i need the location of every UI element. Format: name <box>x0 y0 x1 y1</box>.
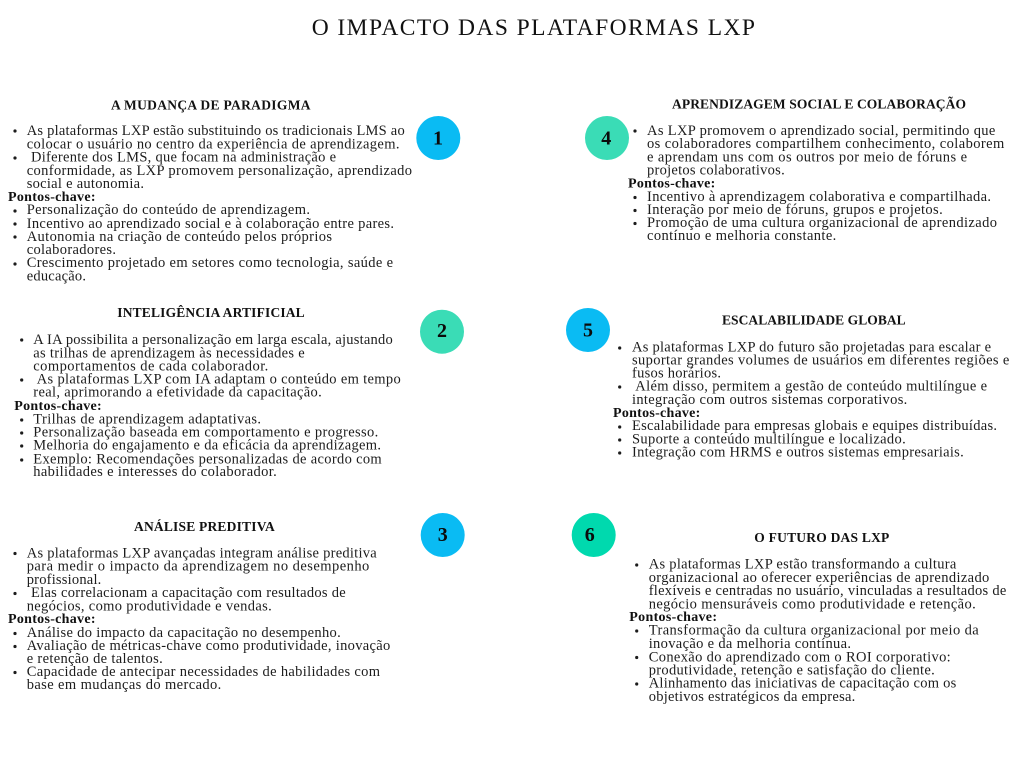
key points 6 <box>629 610 979 705</box>
key points 5: Suporte a conteúdo multilíngue e localizado. <box>632 431 906 447</box>
key points 6: Pontos-chave: <box>629 610 717 625</box>
key points 4: Incentivo à aprendizagem colaborativa e compartilhada. <box>647 189 991 205</box>
key points 6: objetivos estratégicos da empresa. <box>649 689 855 705</box>
panel: aprendizagem social e colaboração <box>628 96 1005 244</box>
key points 1: Crescimento projetado em setores como tecnologia, saúde e <box>27 255 393 271</box>
text block: introduction 3: Elas correlacionam a capacitação com resultados de <box>31 585 346 601</box>
text block: introduction 1: conformidade, as LXP promovem personalização, aprendizado <box>27 163 412 179</box>
key points 3: e retenção de talentos. <box>27 651 163 667</box>
key points 3 <box>8 612 390 693</box>
text block: introduction 2 <box>20 332 401 401</box>
icon: number badge 6: 6 <box>585 524 595 546</box>
text block: introduction 3 <box>13 545 377 614</box>
text block: introduction 6 <box>635 556 1006 612</box>
text block: introduction 2: As plataformas LXP com IA adaptam o conteúdo em tempo <box>37 371 401 387</box>
text block: introduction 2: as trilhas de aprendizagem às necessidades e <box>33 345 305 361</box>
key points 2 <box>14 399 382 480</box>
panel: análise preditiva <box>8 519 390 693</box>
text block: introduction 2: comportamentos de cada colaborador. <box>33 358 268 374</box>
key points 1: colaboradores. <box>27 242 116 258</box>
key points 4 <box>628 176 997 244</box>
icon: number badge 5: 5 <box>583 320 593 342</box>
panel: a mudança de paradigma <box>8 97 412 284</box>
text block: introduction 4: projetos colaborativos. <box>647 162 785 178</box>
key points 4: contínuo e melhoria constante. <box>647 228 836 244</box>
key points 4: Interação por meio de fóruns, grupos e projetos. <box>647 202 943 218</box>
key points 4: Promoção de uma cultura organizacional de aprendizado <box>647 215 997 231</box>
text block: introduction 5: Além disso, permitem a gestão de conteúdo multilíngue e <box>635 378 987 394</box>
key points 1: educação. <box>27 268 86 284</box>
key points 2: habilidades e interesses do colaborador. <box>33 464 277 480</box>
heading: escalabilidade global: ESCALABILIDADE GLOBAL <box>722 312 906 327</box>
key points 1: Pontos-chave: <box>8 190 96 205</box>
text block: introduction 5 <box>618 340 1009 408</box>
key points 2: Exemplo: Recomendações personalizadas de acordo com <box>33 451 382 467</box>
key points 3: Análise do impacto da capacitação no desempenho. <box>27 625 341 641</box>
text block: introduction 6: negócio mensuráveis como produtividade e retenção. <box>649 596 976 612</box>
text block: introduction 5: suportar grandes volumes de usuários em diferentes regiões e <box>632 352 1009 368</box>
panel: inteligência artificial <box>14 305 401 480</box>
text block: introduction 6: flexíveis e centradas no usuário, vinculadas a resultados de <box>649 583 1006 599</box>
heading: inteligência artificial: INTELIGÊNCIA ARTIFICIAL <box>117 305 305 320</box>
text block: introduction 6: organizacional ao oferecer experiências de aprendizado <box>649 570 989 586</box>
key points 2: Trilhas de aprendizagem adaptativas. <box>33 411 261 427</box>
icon: number badge 6 <box>572 513 616 557</box>
text block: introduction 4 <box>633 123 1005 178</box>
icon: number badge 1: 1 <box>433 128 443 150</box>
text block: introduction 5: fusos horários. <box>632 365 721 381</box>
key points 6: Alinhamento das iniciativas de capacitação com os <box>649 675 957 691</box>
icon: number badge 4: 4 <box>601 128 611 150</box>
key points 5 <box>613 406 997 460</box>
key points 4: Pontos-chave: <box>628 176 715 191</box>
key points 3: Avaliação de métricas-chave como produtividade, inovação <box>27 638 390 654</box>
panel: o futuro das lxp <box>629 530 1006 705</box>
text block: introduction 1 <box>13 123 412 192</box>
icon: number badge 3: 3 <box>438 524 448 546</box>
text block: introduction 5: integração com outros sistemas corporativos. <box>632 392 907 408</box>
key points 6: inovação e da melhoria contínua. <box>649 636 851 652</box>
text block: introduction 4: e aprendam uns com os outros por meio de fóruns e <box>647 150 967 166</box>
text block: introduction 5: As plataformas LXP do futuro são projetadas para escalar e <box>632 340 991 356</box>
text block: introduction 2: real, aprimorando a efetividade da capacitação. <box>33 385 322 401</box>
text block: introduction 1: Diferente dos LMS, que focam na administração e <box>31 150 336 166</box>
key points 5: Integração com HRMS e outros sistemas empresariais. <box>632 444 964 460</box>
text block: introduction 2: A IA possibilita a personalização em larga escala, ajustando <box>33 332 393 348</box>
heading: a mudança de paradigma: A MUDANÇA DE PARADIGMA <box>111 97 311 112</box>
panel: escalabilidade global <box>613 312 1009 460</box>
key points 3: Pontos-chave: <box>8 612 96 627</box>
heading: análise preditiva: ANÁLISE PREDITIVA <box>134 519 275 534</box>
key points 2: Pontos-chave: <box>14 399 102 414</box>
key points 2: Personalização baseada em comportamento e progresso. <box>33 424 378 440</box>
icon: number badge 2 <box>420 310 464 354</box>
key points 1 <box>8 190 394 284</box>
icon: number badge 2: 2 <box>437 320 447 342</box>
text block: introduction 1: As plataformas LXP estão substituindo os tradicionais LMS ao <box>27 123 405 139</box>
text block: introduction 6: As plataformas LXP estão transformando a cultura <box>649 556 957 572</box>
key points 3: Capacidade de antecipar necessidades de habilidades com <box>27 664 381 680</box>
text block: introduction 4: As LXP promovem o aprendizado social, permitindo que <box>647 123 995 139</box>
key points 5: Pontos-chave: <box>613 406 700 421</box>
text block: introduction 1: colocar o usuário no centro da experiência de aprendizagem. <box>27 136 399 152</box>
key points 6: Transformação da cultura organizacional por meio da <box>649 622 979 638</box>
key points 6: produtividade, retenção e satisfação do cliente. <box>649 662 935 678</box>
icon: number badge 5 <box>566 308 610 352</box>
key points 1: Personalização do conteúdo de aprendizagem. <box>27 202 310 218</box>
key points 3: base em mudanças do mercado. <box>27 677 221 693</box>
text block: introduction 3: negócios, como produtividade e vendas. <box>27 598 272 614</box>
text block: introduction 3: profissional. <box>27 572 101 588</box>
text block: introduction 4: os colaboradores compartilhem conhecimento, colaborem <box>647 136 1005 152</box>
heading: o futuro das lxp: O FUTURO DAS LXP <box>754 530 889 545</box>
icon: number badge 3 <box>421 513 465 557</box>
key points 1: Autonomia na criação de conteúdo pelos próprios <box>27 229 332 245</box>
text block: introduction 3: As plataformas LXP avançadas integram análise preditiva <box>27 545 377 561</box>
key points 2: Melhoria do engajamento e da eficácia da aprendizagem. <box>33 437 381 453</box>
text block: introduction 3: para medir o impacto da aprendizagem no desempenho <box>27 558 369 574</box>
text block: introduction 1: social e autonomia. <box>27 176 144 192</box>
icon: number badge 4 <box>585 116 629 160</box>
icon: number badge 1 <box>416 116 460 160</box>
key points 1: Incentivo ao aprendizado social e à colaboração entre pares. <box>27 216 394 232</box>
heading: aprendizagem social e colaboração: APRENDIZAGEM SOCIAL E COLABORAÇÃO <box>672 96 966 112</box>
key points 6: Conexão do aprendizado com o ROI corporativo: <box>649 649 951 665</box>
key points 5: Escalabilidade para empresas globais e equipes distribuídas. <box>632 418 997 434</box>
title: O IMPACTO DAS PLATAFORMAS LXP <box>312 15 755 41</box>
